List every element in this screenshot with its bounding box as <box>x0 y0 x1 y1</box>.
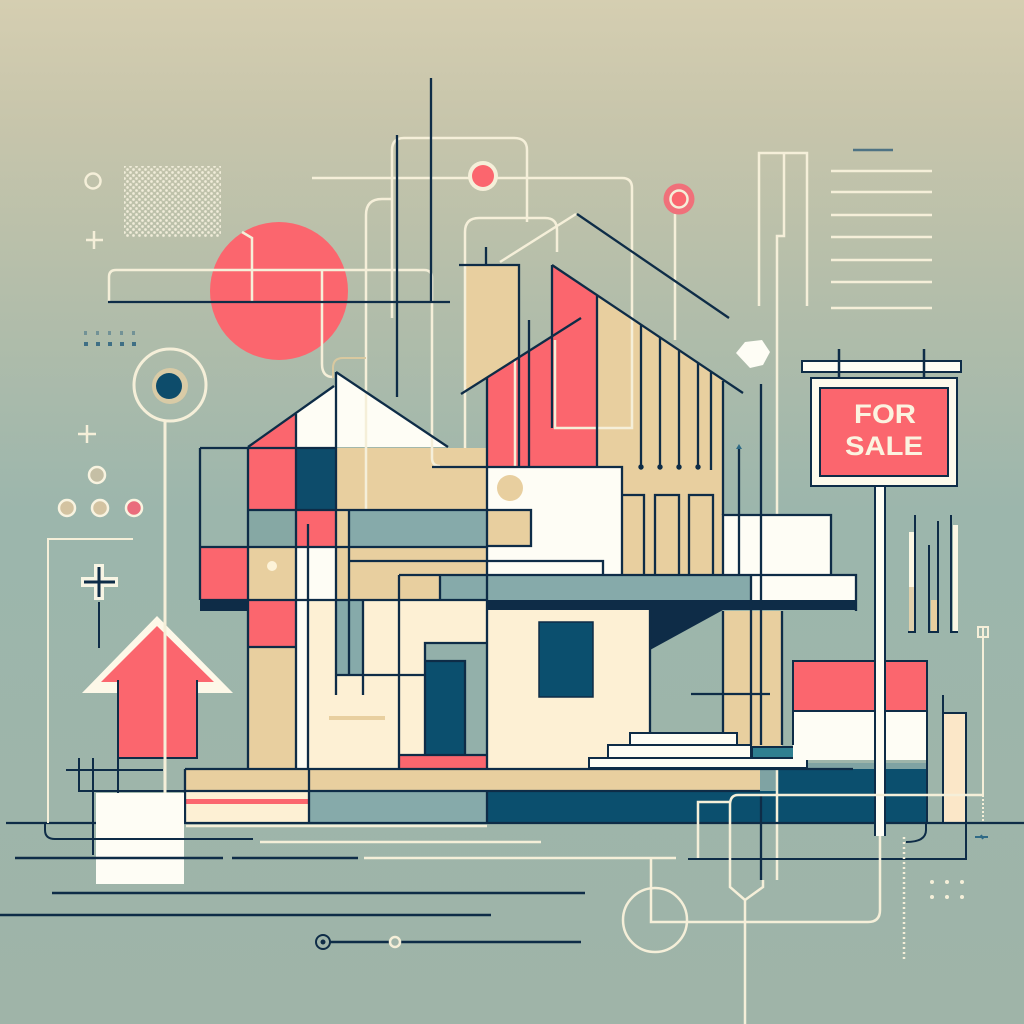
porch beam <box>440 575 856 650</box>
right low block <box>793 661 927 823</box>
FOR SALE sign <box>802 349 961 836</box>
dotted texture square <box>124 166 221 237</box>
upper house tower block <box>464 265 519 392</box>
slider control <box>316 935 581 949</box>
left house colour blocks <box>200 448 487 769</box>
white window block <box>487 468 622 575</box>
ground lines <box>0 826 676 915</box>
dot grid upper left <box>84 331 136 346</box>
door <box>400 643 487 769</box>
coral location marker one <box>468 161 498 191</box>
left target circle <box>134 349 206 421</box>
small square marker right <box>978 627 988 823</box>
left small dots and plus <box>59 425 142 516</box>
text-like lines upper right <box>831 150 932 308</box>
cream line network <box>109 138 807 880</box>
left bracket line <box>48 539 133 823</box>
FOR SALE sign: FOR <box>854 399 916 429</box>
upper house tan wall <box>597 296 723 575</box>
navy window <box>539 622 593 697</box>
porch column <box>723 611 782 769</box>
right white annex <box>723 515 831 575</box>
left house gable <box>248 372 448 447</box>
top left small icons <box>86 174 103 249</box>
lower right navy accents <box>906 823 988 842</box>
coral location marker two <box>664 184 694 214</box>
coral sun circle <box>210 222 348 360</box>
hexagon <box>736 340 770 368</box>
tall block navy edge <box>688 695 966 859</box>
pendant dots <box>638 444 742 470</box>
front entrance wall <box>488 610 650 769</box>
tall tan block right <box>944 713 966 822</box>
upper house coral wall <box>487 265 597 467</box>
target stem over arrow <box>164 421 166 793</box>
tan curved accent by gable <box>333 358 366 378</box>
navy house line work <box>6 78 1024 880</box>
lower left cream card <box>45 758 253 884</box>
lower right line network <box>623 795 983 1024</box>
foundation <box>185 769 926 823</box>
porch steps <box>589 733 807 768</box>
up arrow <box>82 616 233 758</box>
cross icon <box>81 564 118 648</box>
FOR SALE sign: SALE <box>845 431 923 461</box>
dotted grid lower right <box>930 880 964 899</box>
vertical bars right of sign <box>908 515 958 632</box>
